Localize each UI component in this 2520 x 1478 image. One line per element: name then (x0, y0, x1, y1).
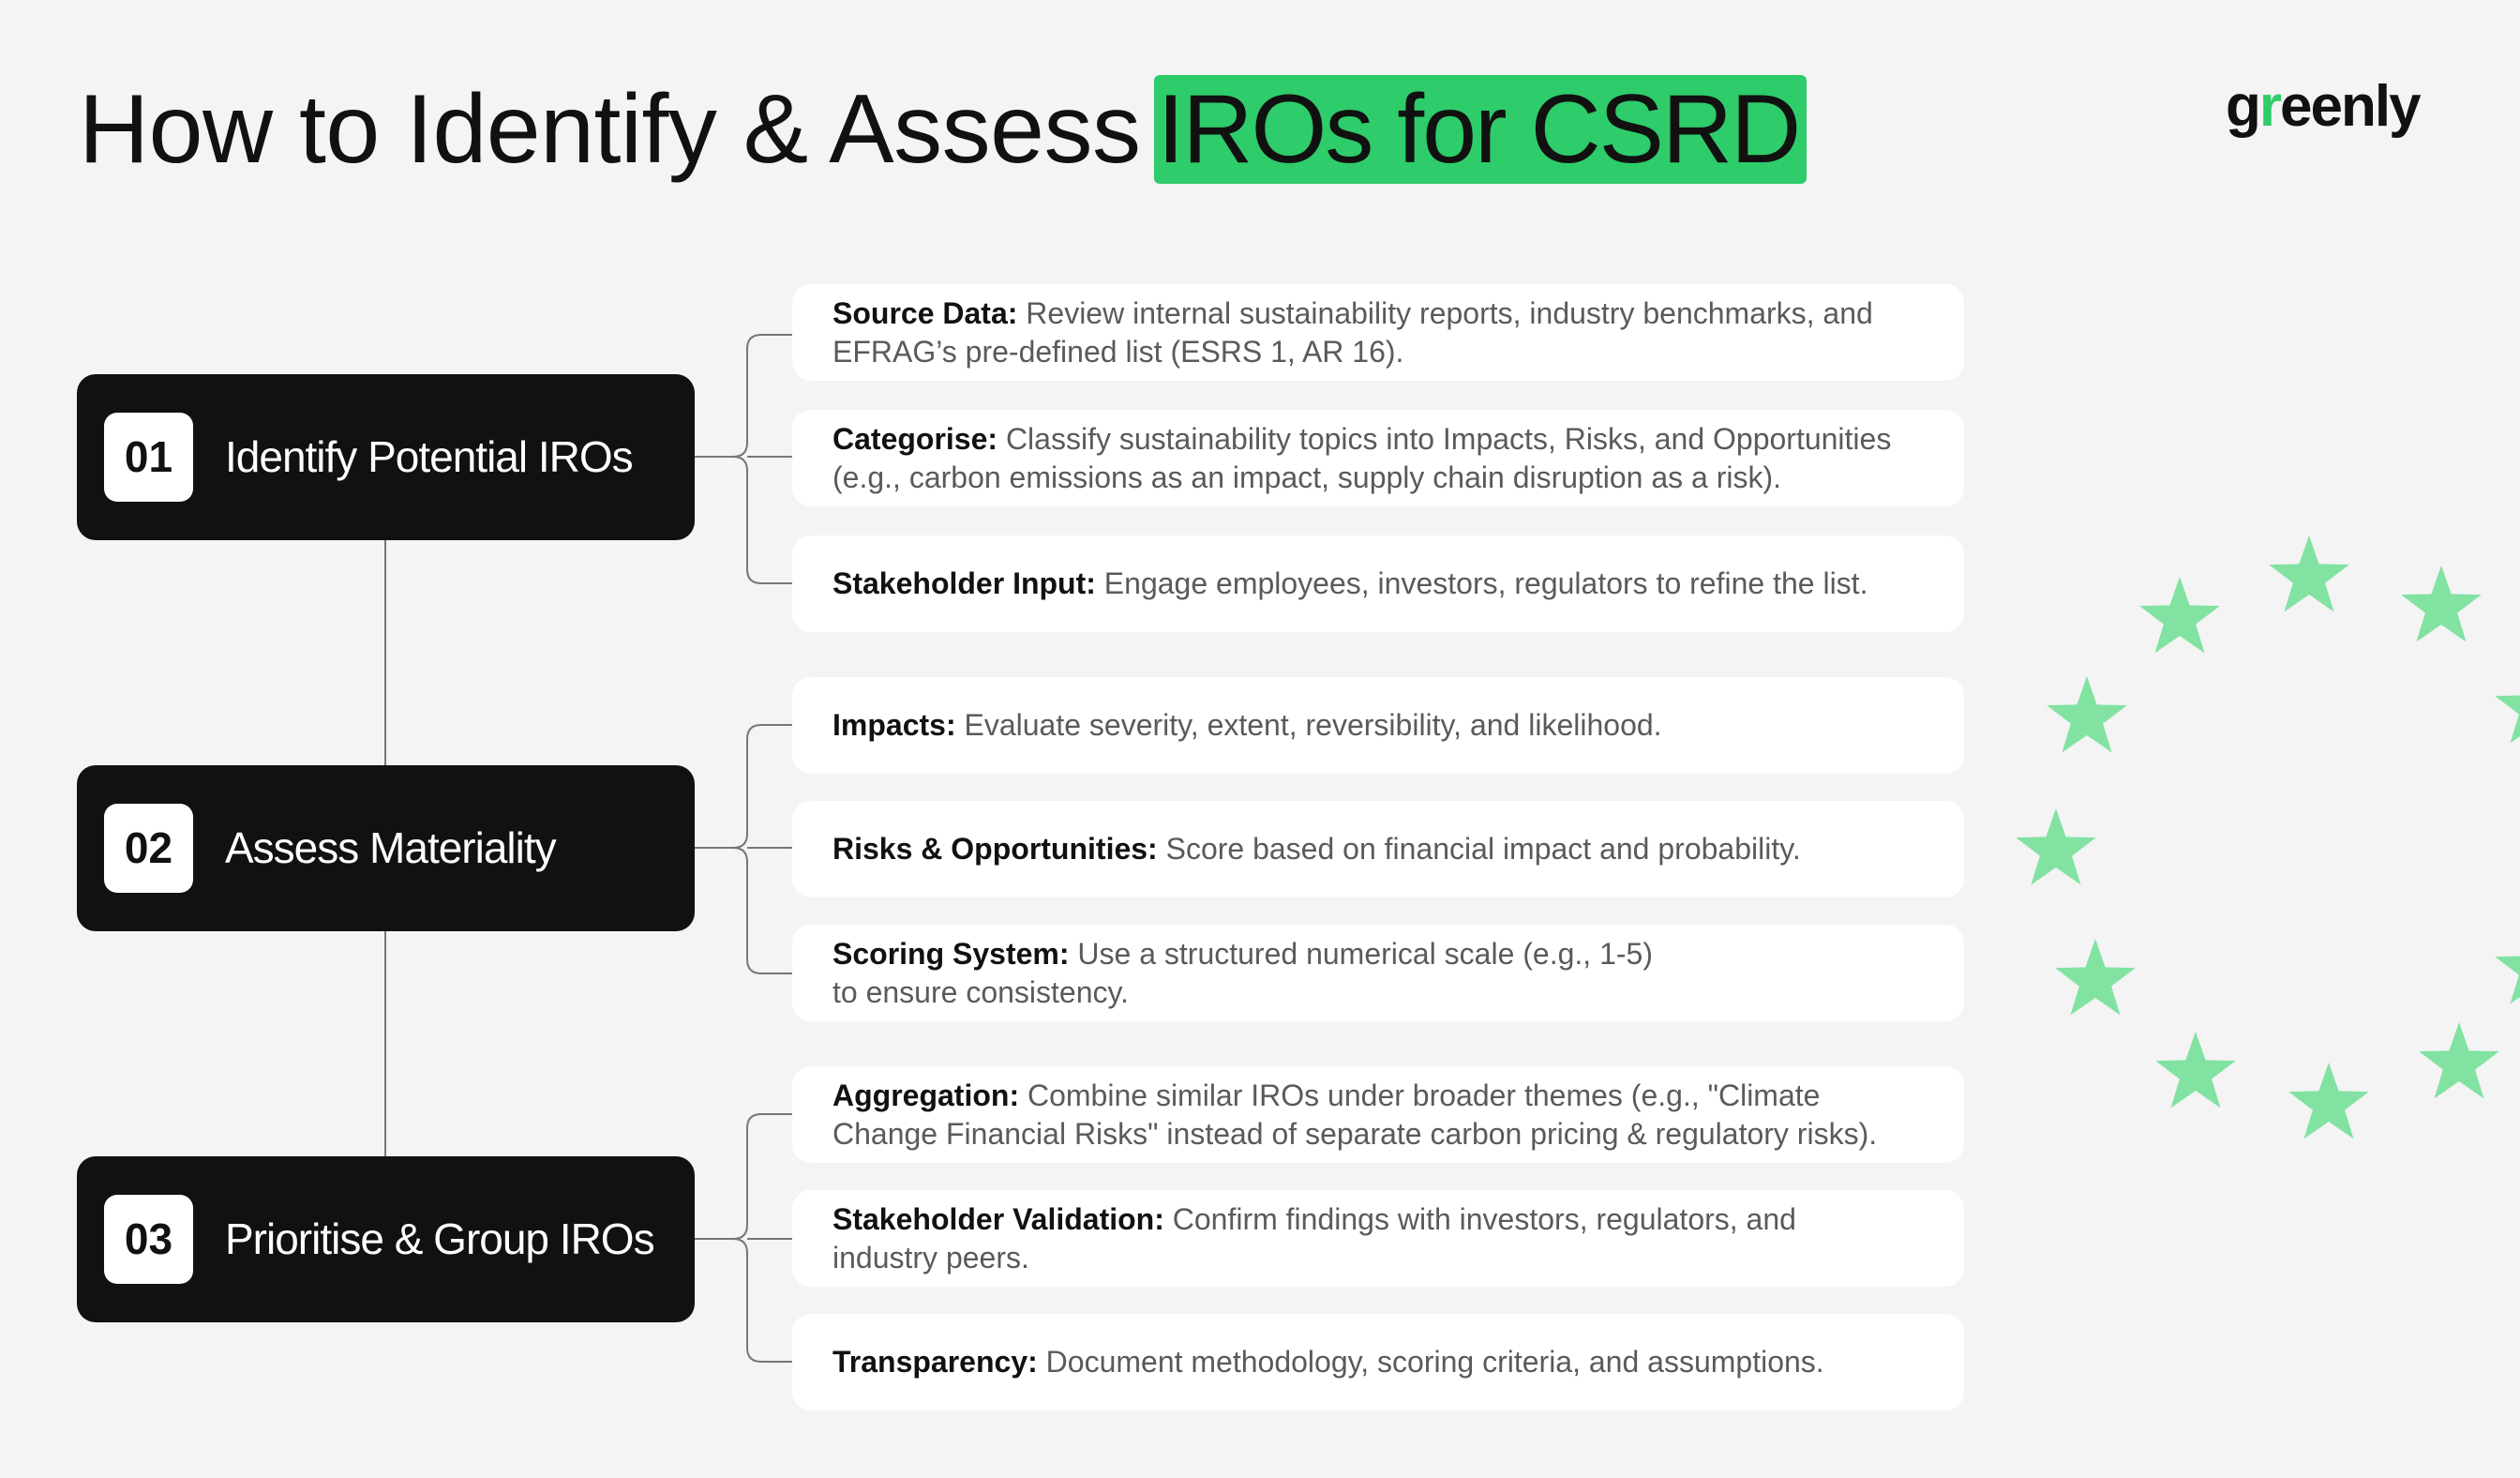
card: source data (792, 284, 1964, 381)
card: aggregation (792, 1066, 1964, 1163)
logo: greenly (2226, 74, 2420, 139)
card: source data: EFRAG’s pre-defined list (ESRS 1, AR 16). (832, 334, 1403, 368)
card: validation (792, 1190, 1964, 1287)
step 02: 02 (125, 823, 172, 872)
card: transparency: Transparency: Document methodology, scoring criteria, and assumptions. (832, 1345, 1824, 1379)
card: categorise: Categorise: Classify sustainability topics into Impacts, Risks, and Opportunities (832, 422, 1891, 456)
card: categorise (792, 410, 1964, 506)
card: source data: Source Data: Review internal sustainability reports, industry benchmarks, and (832, 296, 1873, 330)
card: scoring: to ensure consistency. (832, 975, 1129, 1009)
card: transparency (792, 1314, 1964, 1410)
card: categorise: (e.g., carbon emissions as an impact, supply chain disruption as a risk). (832, 460, 1781, 493)
card: scoring (792, 925, 1964, 1021)
step 03: Prioritise & Group IROs (225, 1214, 654, 1263)
step 03: 03 (125, 1214, 172, 1263)
card: risks (792, 801, 1964, 897)
connectors (385, 335, 792, 1362)
card: stakeholder input (792, 535, 1964, 632)
card: aggregation: Change Financial Risks" instead of separate carbon pricing & regulatory risks). (832, 1116, 1877, 1150)
step 03 (77, 1156, 695, 1322)
card: stakeholder input: Stakeholder Input: Engage employees, investors, regulators to refine the list. (832, 566, 1868, 600)
step 01 (77, 374, 695, 540)
card: validation: Stakeholder Validation: Confirm findings with investors, regulators, and (832, 1202, 1796, 1236)
card: impacts: Impacts: Evaluate severity, extent, reversibility, and likelihood. (832, 708, 1662, 742)
step 02 (77, 765, 695, 931)
EU stars decoration (2016, 535, 2520, 1139)
card: risks: Risks & Opportunities: Score based on financial impact and probability. (832, 832, 1801, 866)
card: impacts (792, 677, 1964, 774)
card: aggregation: Aggregation: Combine similar IROs under broader themes (e.g., "Climate (832, 1078, 1820, 1112)
step 02: Assess Materiality (225, 823, 556, 872)
card: scoring: Scoring System: Use a structured numerical scale (e.g., 1-5) (832, 936, 1653, 970)
step 01: Identify Potential IROs (225, 432, 633, 481)
title: How to Identify & AssessIROs for CSRD (79, 75, 1799, 184)
card: validation: industry peers. (832, 1240, 1029, 1274)
step 01: 01 (125, 432, 172, 481)
